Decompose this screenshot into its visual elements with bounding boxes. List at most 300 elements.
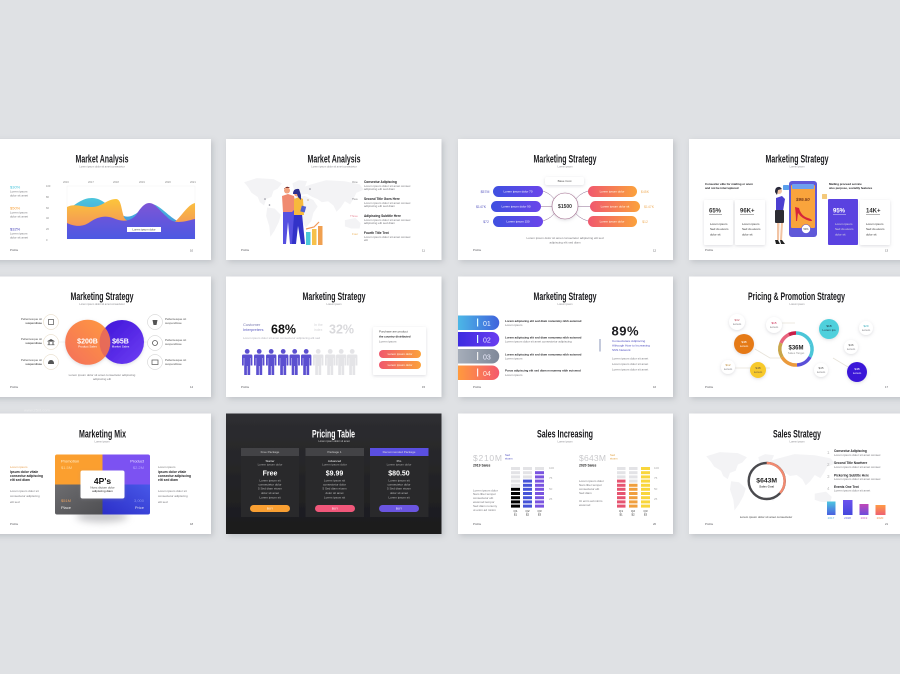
left bar columns: 75 — [549, 476, 553, 480]
tab descriptions: Lorem ipsum — [505, 323, 523, 327]
stat cards: Lorem ipsum — [742, 222, 760, 226]
left pills: Lorem ipsum dolor 70 — [503, 190, 533, 194]
list — [350, 180, 411, 242]
tab descriptions — [505, 319, 582, 377]
right icon nodes: Pellentesque sit — [165, 358, 186, 362]
plan card: pro highlighted: Recommended Package — [383, 450, 416, 454]
plan card: advanced: Lorem ipsum sit — [324, 496, 345, 500]
area chart: 2016 — [63, 180, 69, 184]
quadrant grid: Promotion — [61, 458, 79, 464]
left text: consectur adipiscing — [10, 474, 43, 478]
donut: $36M — [788, 346, 804, 352]
list: adipiscing elit sed diam — [364, 187, 396, 191]
left stat — [473, 453, 513, 512]
left text: Ipsum dolor vitale — [10, 470, 38, 474]
tab descriptions: Lorem ipsum dolor sit amet consectetur adipiscing — [505, 340, 572, 344]
left bar columns: Q3 — [537, 509, 542, 513]
venn circles: Market Sales — [112, 344, 130, 348]
left icon nodes: Pellentesque sit — [21, 358, 42, 362]
area chart: 100 — [46, 184, 51, 188]
right bar columns: $3 — [644, 512, 647, 516]
heading: Sales Strategy — [773, 428, 822, 440]
slide: market analysis chart — [0, 139, 211, 260]
numbered tabs: 02 — [483, 337, 491, 344]
right bar columns: $2 — [631, 512, 635, 516]
left icon nodes: Pellentesque sit — [21, 317, 42, 321]
venn circles: Product Sales — [78, 344, 97, 348]
footer: Profire — [705, 522, 714, 526]
slide: marketing strategy venn: 14 — [190, 385, 194, 389]
area chart: 2021 — [190, 180, 196, 184]
left icon nodes: suspendisse — [25, 321, 42, 325]
numbered tabs: 04 — [483, 371, 491, 378]
footer: Profire — [241, 248, 250, 252]
area chart: 2018 — [113, 180, 119, 184]
heading: Marketing Strategy — [766, 154, 829, 166]
heading: Marketing Strategy — [534, 291, 597, 303]
right icon nodes — [140, 314, 186, 370]
colored bubbles — [734, 319, 867, 382]
stat cards: Sed do eiusm — [742, 227, 761, 231]
gradient bars: 2020 — [877, 516, 884, 520]
footer: Profire — [473, 248, 482, 252]
quadrant grid: $2.2M — [133, 465, 144, 470]
slide: marketing mix: Lorem ipsum — [94, 440, 110, 444]
slide: marketing strategy numbered tabs — [458, 276, 673, 397]
side card: Lorem ipsum — [379, 340, 397, 344]
right stat: Nam liber tempor — [579, 483, 602, 487]
left bar columns: $2 — [526, 512, 529, 516]
area chart: 2017 — [88, 180, 94, 184]
right bar columns: Q2 — [631, 509, 635, 513]
percent stats: 68% — [271, 322, 296, 336]
heading: Marketing Strategy — [302, 291, 366, 303]
right stat: $643M — [579, 453, 606, 463]
white bubbles: Lorem — [724, 367, 733, 371]
stat cards — [704, 199, 890, 245]
slide: marketing strategy phone: Lorem ipsum — [790, 164, 804, 168]
plan card: advanced: Lorem ipsum sit — [324, 478, 345, 482]
numbered tabs: 01 — [483, 321, 491, 328]
left text — [10, 465, 43, 504]
plan card: free: Lorem ipsum sit — [259, 496, 281, 500]
heading: Sales Increasing — [537, 428, 593, 440]
area chart: 20 — [46, 227, 49, 231]
plan card: free: Lorem ipsum sit — [259, 478, 281, 482]
slide: market analysis people and map: 11 — [422, 248, 425, 252]
right text: elit sed — [158, 500, 168, 504]
right bar columns: 100 — [654, 466, 659, 470]
right pills: $45K — [641, 190, 650, 194]
quadrant grid: $1.5M — [61, 465, 72, 470]
stat cards: Sed do eiusm — [866, 227, 885, 231]
caption: Lorem ipsum dolor sit amet consectetur adipiscing — [69, 373, 136, 377]
percent stats: Customer — [243, 322, 261, 327]
left stat: ut enim ad minim — [473, 508, 496, 512]
footer: Profire — [473, 385, 482, 389]
legend: three metrics: $32% — [10, 226, 21, 232]
right bar columns: Q3 — [643, 509, 648, 513]
center value circle — [545, 177, 584, 219]
heading: Pricing Table — [312, 428, 355, 440]
caption: Lorem ipsum dolor sit amet consectetur adipiscing elit sed — [526, 236, 604, 240]
slide: marketing mix: www.25xt.com — [24, 408, 50, 412]
left stat: Sed diam nonumy — [473, 504, 498, 508]
right icon nodes: suspendisse — [165, 362, 182, 366]
numbered list: Lorem ipsum dolor sit amet — [834, 488, 870, 492]
left pills — [476, 186, 543, 227]
gradient bars: 2019 — [861, 516, 868, 520]
white bubbles: Lorem — [847, 347, 856, 351]
area chart: 2020 — [165, 180, 171, 184]
slide: marketing mix: 18 — [190, 522, 194, 526]
numbered list: 3 — [827, 474, 830, 479]
slide: sales strategy: Lorem ipsum — [790, 440, 804, 444]
slide: market analysis chart: 10 — [190, 248, 194, 252]
slide: sales increasing — [458, 414, 673, 534]
legend: three metrics: dolor sit amet — [10, 236, 28, 240]
right pills: $147K — [644, 205, 655, 209]
plan card: free — [241, 448, 299, 517]
colored bubbles: Lorem ips — [822, 328, 836, 332]
donut: Sales Target — [788, 351, 804, 355]
list: Adipiscing Subtitle Here — [364, 214, 401, 218]
illustration: phone with shoe — [789, 181, 827, 237]
colored bubbles: $4B — [741, 340, 747, 344]
legend: three metrics: dolor sit amet — [10, 214, 28, 218]
connector lines — [734, 323, 848, 368]
right stat: eiusm — [610, 456, 618, 460]
list: Second Title Goes Here — [364, 197, 400, 201]
left stat: eiusm — [505, 456, 513, 460]
right pills: Lorem ipsum dolor — [600, 190, 624, 194]
tab descriptions: Lorem ipsum — [505, 356, 523, 360]
world map — [244, 178, 364, 237]
left pills: $57M — [481, 190, 489, 194]
white bubbles: $12 — [725, 363, 731, 367]
slide: marketing strategy people pictogram — [226, 276, 442, 397]
right stat: Ut enim ad minim — [579, 499, 603, 503]
stat cards: 14K+ — [866, 208, 881, 214]
left text: elit sed — [10, 500, 20, 504]
colored bubbles: $4B — [755, 366, 761, 370]
center value circle: $1500 — [558, 204, 572, 210]
illustration: phone with shoe: 50% — [803, 228, 809, 231]
list: Fourth Title Text — [364, 231, 390, 235]
slide: marketing strategy pills: 12 — [653, 248, 657, 252]
stat cards: dolor sit — [835, 232, 846, 236]
intro texts: also purpose, sociality features — [829, 186, 873, 190]
right text: elit sed diam — [158, 478, 178, 482]
stat cards: 95% — [833, 208, 846, 214]
left stat: eiusmod tempor — [473, 500, 495, 504]
slide: marketing strategy phone — [689, 139, 900, 260]
plan card: pro highlighted: Lorem ipsum sit — [388, 496, 410, 500]
stat cards: Lorem ipsum — [866, 222, 884, 226]
big stat: Lorem ipsum dolor sit amet — [612, 368, 648, 372]
right stat — [579, 453, 618, 507]
plan card: free: consectetur dolor — [258, 482, 282, 486]
right icon nodes: suspendisse — [165, 321, 182, 325]
donut — [780, 333, 812, 365]
right icon nodes: Pellentesque sit — [165, 317, 186, 321]
list: Lorem ipsum dolor sit amet consec — [364, 235, 411, 239]
numbered tabs: 03 — [483, 354, 491, 361]
white bubbles: Lorem — [770, 325, 779, 329]
left stat: 2019 Sales — [473, 464, 490, 468]
footer: Profire — [241, 385, 250, 389]
left icon nodes — [21, 314, 66, 370]
slide: market analysis people and map: Lorem ipsum dolor sit amet consectetur — [311, 164, 357, 168]
side card: Lorem ipsum dolor — [388, 363, 412, 367]
plan card: free: Starter — [265, 459, 275, 463]
plan card: pro highlighted: Lorem ipsum dolor — [387, 462, 411, 466]
right text: ipsum dolor vitale — [158, 470, 186, 474]
list: Four — [352, 232, 358, 236]
slide: sales strategy — [689, 414, 900, 534]
quadrant grid: $51M — [61, 498, 71, 503]
stat cards: Sed do eiusm — [710, 227, 729, 231]
numbered list: Lorem ipsum dolor sit amet consec — [834, 465, 881, 469]
world map — [706, 452, 835, 510]
legend: three metrics — [10, 184, 28, 240]
gradient bars: 2018 — [844, 516, 851, 520]
tab descriptions: Lorem ipsum — [505, 373, 523, 377]
slide: sales strategy: 21 — [885, 522, 889, 526]
footer: Profire — [705, 248, 714, 252]
right stat: consectetur elit — [579, 487, 599, 491]
quadrant grid: Product — [130, 458, 145, 464]
intro texts: Mailing proceed service — [829, 182, 862, 186]
big stat: Although How to Increasing — [612, 344, 650, 348]
plan card: free: Lorem ipsum dolor — [258, 462, 282, 466]
colored bubbles: Lorem — [740, 344, 749, 348]
plan card: pro highlighted: 5 Sed diam eiusm — [387, 486, 412, 490]
quadrant grid: 3,000 — [134, 498, 145, 503]
list: Two — [352, 197, 358, 201]
colored bubbles: Lorem — [754, 370, 763, 374]
big stat: Lorem ipsum dolor sit amet — [612, 362, 648, 366]
connector arcs — [541, 191, 590, 221]
plan card: pro highlighted: $80.50 — [388, 470, 410, 478]
white bubbles — [721, 314, 873, 377]
side card — [373, 327, 426, 375]
left text: elit sed diam — [10, 478, 30, 482]
right pills: Lorem ipsum dolor — [600, 220, 624, 224]
numbered tabs — [458, 316, 499, 380]
colored bubbles: $4B — [854, 367, 860, 371]
quadrant grid: Place — [61, 505, 72, 510]
left pills: Lorem ipsum dolor 90 — [501, 204, 531, 208]
slide: marketing strategy venn: Lorem ipsum dolor sit amet consectetur — [79, 302, 125, 306]
donut with total: Sales Goal — [759, 484, 774, 488]
plan card: advanced: consectetur dolor — [323, 482, 346, 486]
left bar columns: Q1 — [513, 509, 518, 513]
quadrant grid: adipiscing diam — [92, 489, 113, 493]
list: elit — [364, 238, 368, 242]
numbered list: 4 — [827, 486, 830, 491]
colored bubbles: $1B — [826, 324, 832, 328]
slide: marketing strategy venn — [0, 276, 211, 397]
donut with total: $643M — [756, 478, 777, 484]
pictogram row of people — [242, 349, 357, 375]
left bar columns: 50 — [549, 487, 553, 491]
intro texts: Consectur elite for mailing or anon — [705, 182, 753, 186]
list: adipiscing elit sed diam — [364, 204, 396, 208]
legend: three metrics: $30% — [10, 184, 21, 190]
left icon nodes: suspendisse — [25, 362, 42, 366]
venn circles: $65B — [112, 338, 129, 346]
big stat: Lorem ipsum dolor sit amet — [612, 356, 648, 360]
slide: marketing strategy phone: 13 — [885, 248, 889, 252]
quadrant grid: Price — [135, 505, 145, 510]
white bubbles: $45 — [818, 366, 824, 370]
plan card: advanced — [306, 448, 364, 517]
plan card: advanced: $9.99 — [326, 470, 343, 478]
left text: consectetur adipiscing — [10, 494, 40, 498]
big stat: Consectutare Adipiscing — [612, 339, 645, 343]
legend: three metrics: Lorem ipsum — [10, 232, 28, 236]
footer: Profire — [473, 522, 482, 526]
right text: Lorem ipsum — [158, 465, 176, 469]
slide: pricing and promotion strategy: Lorem ipsum — [790, 302, 804, 306]
list: Lorem ipsum dolor sit amet consec — [364, 184, 411, 188]
numbered list: Lorem ipsum dolor sit amet consec — [834, 453, 881, 457]
right stat: Sed — [610, 453, 615, 457]
white bubbles: Lorem — [817, 370, 826, 374]
list: Three — [350, 214, 358, 218]
slide: marketing strategy numbered tabs: Lorem ipsum — [558, 302, 572, 306]
footer: Profire — [10, 522, 19, 526]
left bar columns: 100 — [549, 466, 554, 470]
plan card: free: dolor sit amet — [261, 491, 279, 495]
left stat: Lorem ipsum dolor — [473, 488, 498, 492]
side card: the country distributed — [379, 334, 411, 338]
legend: three metrics: $50% — [10, 206, 21, 210]
right stat: Lorem ipsum dolor — [579, 479, 604, 483]
right stat: eiusmod — [579, 503, 591, 507]
numbered list: Second Title Nowhere — [834, 461, 867, 465]
right bar columns — [617, 466, 659, 516]
legend: three metrics: dolor sit amet — [10, 194, 28, 198]
right pills: $12 — [642, 220, 648, 224]
plan card: free: Free Package — [261, 450, 280, 454]
heading: Marketing Mix — [79, 428, 127, 440]
left bar columns: $1 — [514, 512, 517, 516]
left icon nodes: suspendisse — [25, 341, 42, 345]
percent stats — [243, 322, 354, 340]
right pills — [588, 186, 655, 227]
plan card: pro highlighted — [370, 448, 428, 517]
slide: pricing and promotion strategy: 17 — [885, 385, 889, 389]
legend: three metrics: Lorem ipsum — [10, 190, 28, 194]
right text — [158, 465, 191, 504]
legend: three metrics: Lorem ipsum — [10, 210, 28, 214]
area chart: Lorem ipsum dolor — [132, 228, 156, 232]
plan card: pro highlighted: Pro — [397, 459, 402, 463]
stat cards: dolor sit — [866, 232, 877, 236]
list: One — [352, 180, 358, 184]
left bar columns: 25 — [549, 497, 553, 501]
quadrant grid — [55, 454, 150, 522]
area chart: 2019 — [139, 180, 145, 184]
colored bubbles: Lorem — [853, 371, 862, 375]
right bar columns: 25 — [654, 497, 658, 501]
plan card: advanced: Lorem ipsum dolor — [322, 462, 347, 466]
plan card: pro highlighted: consectetur dolor — [387, 482, 411, 486]
plan card: advanced: 5 Sed diam eiusm — [322, 486, 347, 490]
area chart: 40 — [46, 216, 49, 220]
area chart: 60 — [46, 206, 49, 210]
plan card: advanced: Package 1 — [327, 450, 342, 454]
center value circle: Base Cost — [558, 179, 572, 183]
slide: pricing table dark — [226, 414, 442, 534]
side card: Lorem ipsum dolor — [388, 352, 412, 356]
slide: marketing mix — [0, 408, 211, 534]
heading: Marketing Strategy — [70, 291, 134, 303]
illustration: woman with phone — [775, 185, 789, 244]
big stat — [600, 324, 650, 372]
percent stats: Lorem ipsum dolor sit amet consectetur adipiscing elit sed — [243, 336, 320, 340]
big stat: SNS Network — [612, 348, 631, 352]
white bubbles: $46 — [848, 343, 854, 347]
plan card: advanced: BUY — [332, 506, 338, 510]
slide: pricing table dark: Lorem ipsum dolor sit amet — [318, 439, 350, 443]
quadrant grid: 4P's — [94, 476, 111, 486]
venn circles: $200B — [77, 338, 98, 346]
left text: Lorem ipsum dolor sit — [10, 489, 39, 493]
left pills: $72 — [483, 220, 489, 224]
slide: marketing strategy numbered tabs: 16 — [653, 385, 657, 389]
right text: consectur adipiscing — [158, 474, 191, 478]
white bubbles: $32 — [734, 318, 740, 322]
numbered list — [827, 449, 881, 492]
illustration: phone with shoe: $99.50 — [795, 197, 810, 202]
slide: marketing strategy people pictogram: 15 — [422, 385, 426, 389]
left bar columns — [511, 466, 554, 516]
area chart — [46, 180, 196, 242]
intro texts: and not be interruptured — [705, 186, 739, 190]
venn circles — [65, 320, 144, 365]
right stat: 2020 Sales — [579, 464, 596, 468]
right text: Lorem ipsum dolor sit — [158, 489, 187, 493]
stat cards: Lorem ipsum — [710, 222, 728, 226]
left bar columns: Q2 — [525, 509, 530, 513]
tab descriptions: Purus adipiscing elit sed diam nonummy nibh euismod — [505, 368, 581, 372]
white bubbles: $29 — [863, 324, 869, 328]
plan card: free: BUY — [267, 506, 273, 510]
slide: marketing strategy pills: adipiscing elit sed diam — [549, 240, 581, 244]
slide: marketing strategy people pictogram: Lorem ipsum — [326, 302, 342, 306]
slide: marketing strategy pills — [458, 139, 673, 260]
right icon nodes: Pellentesque sit — [165, 338, 186, 342]
big stat: 89% — [612, 324, 639, 338]
footer: Profire — [10, 385, 19, 389]
numbered list: Events One Text — [834, 485, 860, 489]
numbered list: Pickering Subtitle Here — [834, 474, 869, 478]
plan card: free: 5 Sed diam eiusm — [258, 486, 283, 490]
donut with total — [749, 463, 785, 499]
slide: market analysis people and map — [226, 139, 442, 260]
right text: consectetur adipiscing — [158, 494, 188, 498]
numbered list: Lorem ipsum dolor sit amet consec — [834, 477, 881, 481]
slide: marketing strategy pills: Lorem ipsum — [558, 164, 572, 168]
left stat: Nam liber tempor — [473, 492, 496, 496]
area chart: 80 — [46, 195, 49, 199]
heading: Market Analysis — [308, 154, 360, 166]
plan card: advanced: Advanced — [328, 459, 342, 463]
right bar columns: Q1 — [619, 509, 623, 513]
